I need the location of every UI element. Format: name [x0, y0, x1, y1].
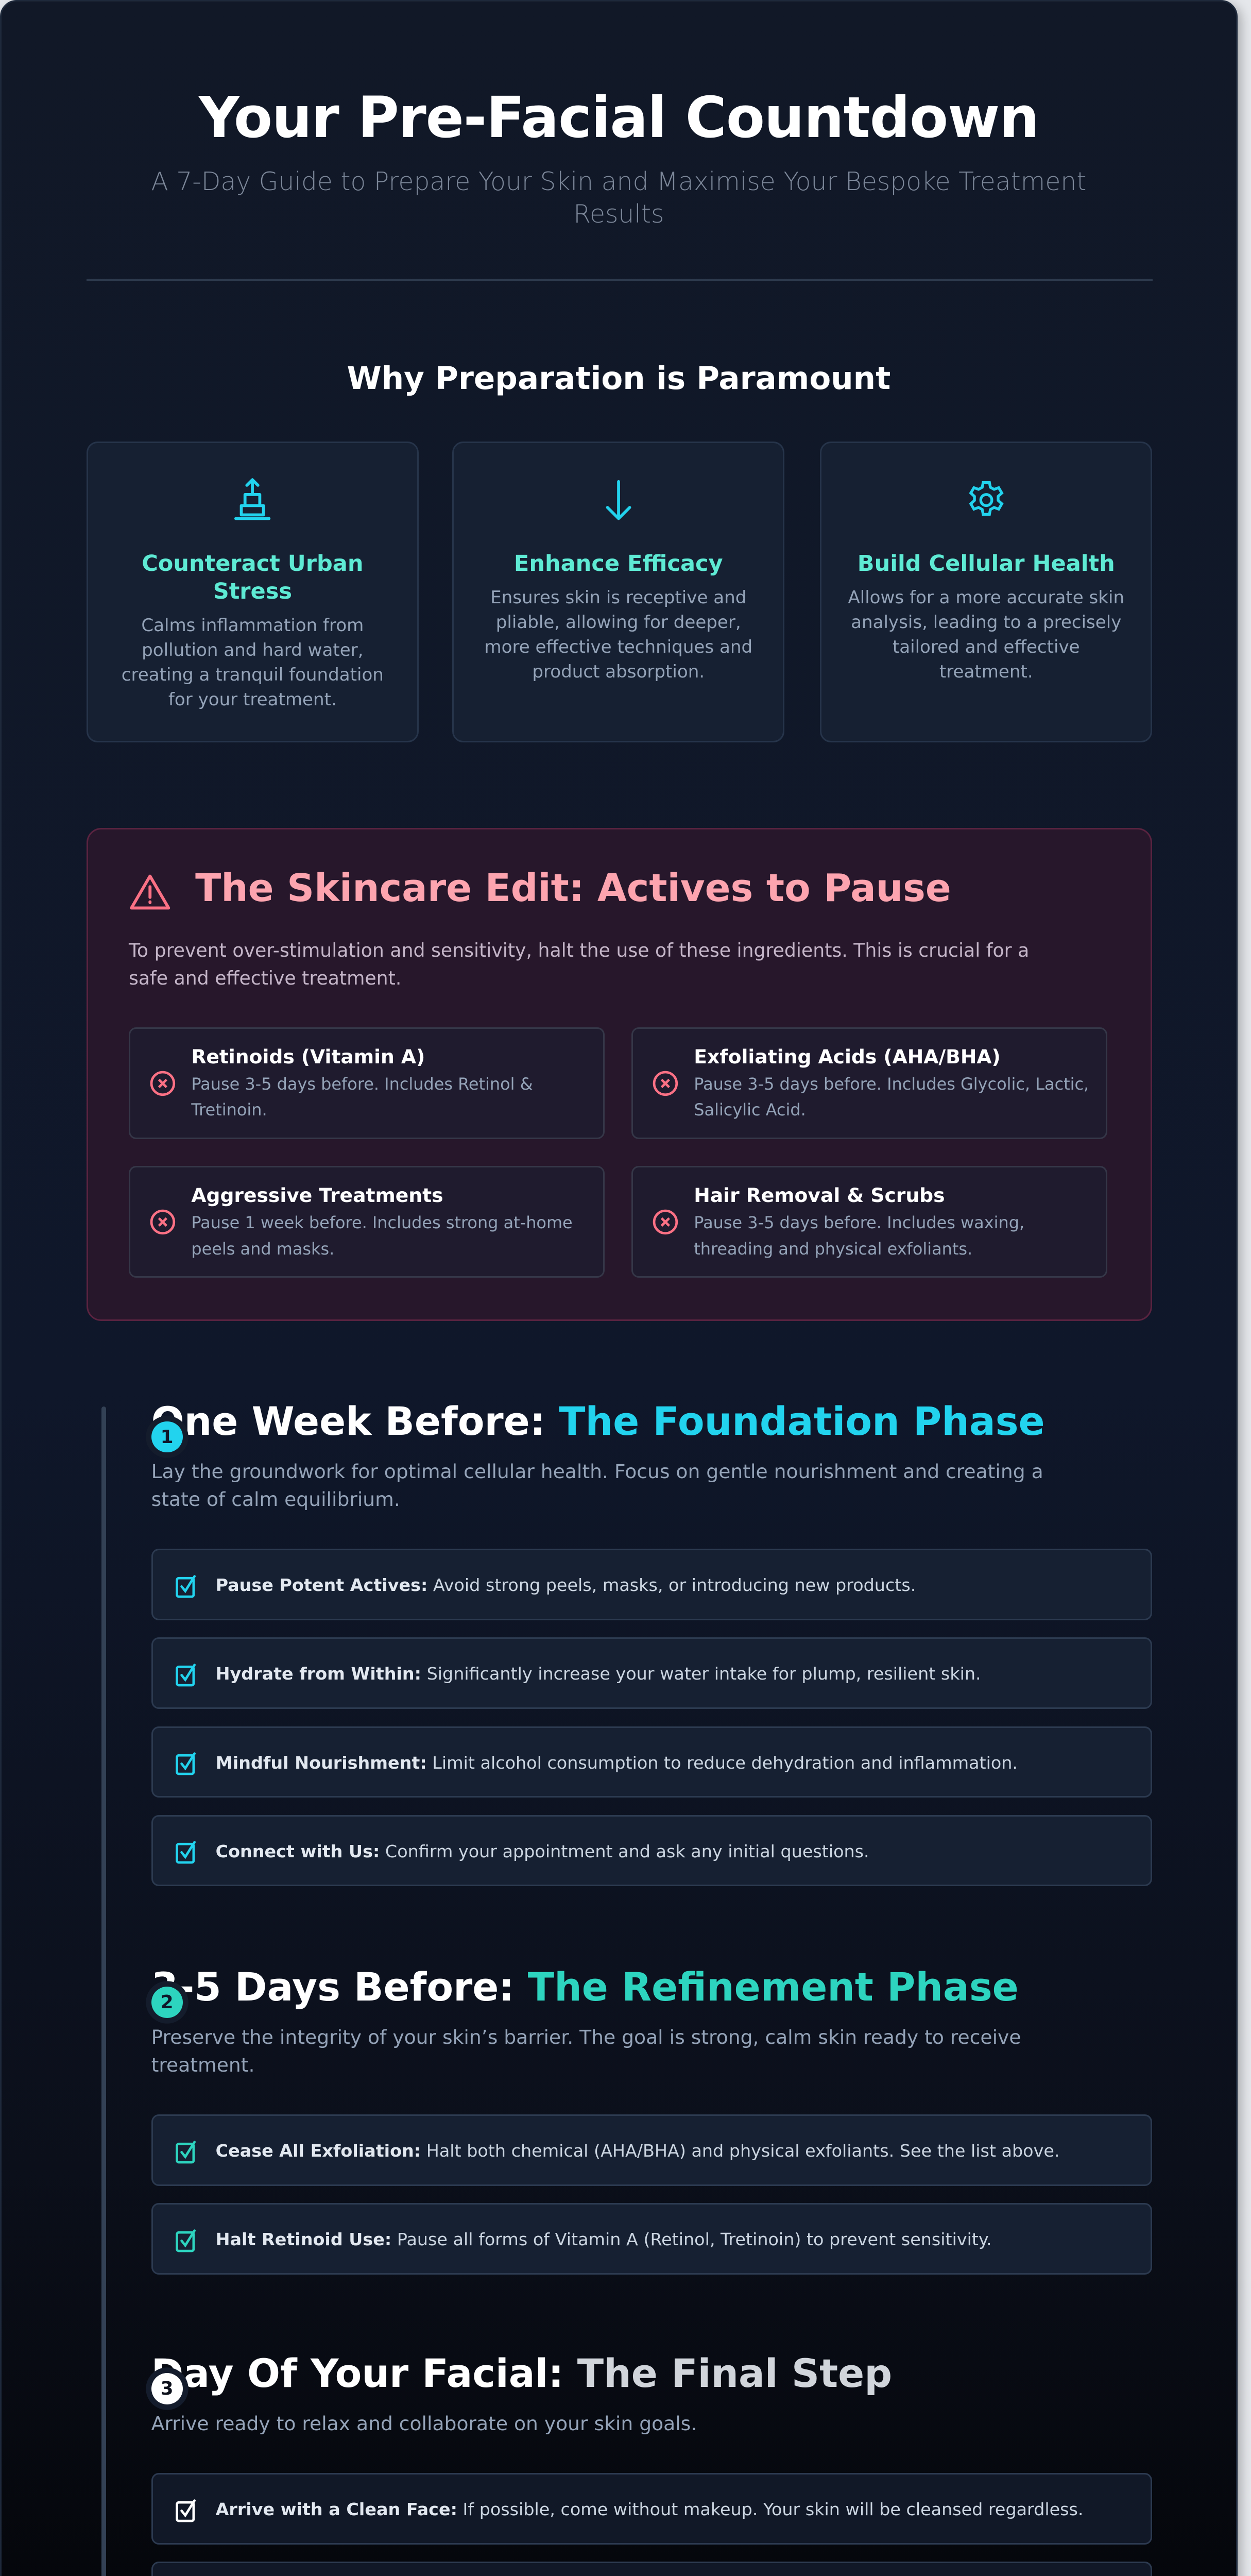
- item: exfoliating acids: [631, 1027, 1107, 1139]
- section 1: [151, 1399, 1152, 1886]
- item: [151, 1637, 1152, 1709]
- number 2: 2: [161, 1992, 174, 2013]
- item: exfoliating acids: Exfoliating Acids (AHA/BHA): [694, 1045, 1001, 1068]
- number 3: 3: [161, 2378, 174, 2399]
- icon: lighthouse: [234, 478, 271, 520]
- panel: counteract urban stress: [87, 442, 419, 742]
- desc 3: Arrive ready to relax and collaborate on your skin goals.: [151, 2412, 697, 2435]
- panel: build cellular health: [820, 442, 1152, 742]
- panel: actives to pause: [87, 828, 1152, 1321]
- panel: build cellular health: Build Cellular Health: [858, 551, 1115, 577]
- item: Hydrate from Within: Significantly increase your water intake for plump, resilient skin.: [216, 1664, 981, 1684]
- section 2: [146, 1964, 1152, 2275]
- heading 1: One Week Before: The Foundation Phase: [151, 1399, 1045, 1444]
- item: [151, 1815, 1152, 1886]
- item: Pause Potent Actives: Avoid strong peels, masks, or introducing new products.: [216, 1575, 916, 1595]
- item: [151, 2562, 1152, 2576]
- icon: arrow down: [606, 480, 631, 520]
- item: retinoids: Pause 3-5 days before. Includes Retinol & Tretinoin.: [191, 1074, 533, 1120]
- panel: enhance efficacy: [452, 442, 784, 742]
- number 3: [151, 2373, 183, 2404]
- panel: counteract urban stress: Calms inflammation from pollution and hard water, creating a tranquil foundation for your treatment.: [122, 615, 384, 710]
- item: retinoids: [129, 1027, 605, 1139]
- title: Your Pre-Facial Countdown: [199, 84, 1039, 150]
- item: exfoliating acids: Pause 3-5 days before. Includes Glycolic, Lactic, Salicylic Acid.: [694, 1074, 1089, 1120]
- item: [151, 1549, 1152, 1620]
- panel: counteract urban stress: Stress: [213, 579, 292, 604]
- heading: why preparation: Why Preparation is Paramount: [347, 360, 890, 397]
- panel: build cellular health: Allows for a more accurate skin analysis, leading to a precisely tailored and effective treatment.: [848, 587, 1124, 682]
- item: aggressive treatments: Pause 1 week before. Includes strong at-home peels and masks.: [191, 1213, 573, 1259]
- desc 1: Lay the groundwork for optimal cellular health. Focus on gentle nourishment and creating a state of calm equilibrium.: [151, 1460, 1043, 1511]
- item: [151, 2114, 1152, 2186]
- heading 2: 3-5 Days Before: The Refinement Phase: [151, 1964, 1019, 2010]
- item: hair removal: [631, 1166, 1107, 1278]
- item: [151, 1726, 1152, 1798]
- intro text: To prevent over-stimulation and sensitivity, halt the use of these ingredients. This is crucial for a safe and effective treatment.: [129, 939, 1029, 989]
- panel: enhance efficacy: Enhance Efficacy: [514, 551, 723, 577]
- item: Cease All Exfoliation: Halt both chemical (AHA/BHA) and physical exfoliants. See the list above.: [216, 2141, 1059, 2161]
- number 1: 1: [161, 1426, 174, 1448]
- item: Connect with Us: Confirm your appointment and ask any initial questions.: [216, 1841, 869, 1861]
- item: [151, 2473, 1152, 2545]
- item: Mindful Nourishment: Limit alcohol consumption to reduce dehydration and inflammation.: [216, 1753, 1018, 1773]
- section 3: [146, 2351, 1152, 2576]
- item: Halt Retinoid Use: Pause all forms of Vitamin A (Retinol, Tretinoin) to prevent sensitivity.: [216, 2229, 992, 2249]
- number 1: [151, 1421, 183, 1452]
- icon: warning: [130, 875, 170, 910]
- number 2: [151, 1987, 183, 2018]
- desc 2: Preserve the integrity of your skin’s barrier. The goal is strong, calm skin ready to receive treatment.: [151, 2026, 1021, 2076]
- item: hair removal: Pause 3-5 days before. Includes waxing, threading and physical exfoliants.: [694, 1213, 1024, 1259]
- panel heading: The Skincare Edit: Actives to Pause: [195, 867, 951, 910]
- timeline line: [101, 1406, 106, 2576]
- item: hair removal: Hair Removal & Scrubs: [694, 1184, 945, 1207]
- item: retinoids: Retinoids (Vitamin A): [191, 1045, 425, 1068]
- item: [151, 2203, 1152, 2275]
- item: aggressive treatments: Aggressive Treatments: [191, 1184, 443, 1207]
- panel: enhance efficacy: Ensures skin is receptive and pliable, allowing for deeper, more effective techniques and product absorption.: [484, 587, 752, 682]
- panel: counteract urban stress: Counteract Urban: [142, 551, 363, 577]
- heading 3: Day Of Your Facial: The Final Step: [151, 2351, 892, 2396]
- item: aggressive treatments: [129, 1166, 605, 1278]
- item: Arrive with a Clean Face: If possible, come without makeup. Your skin will be cleansed regardless.: [216, 2499, 1084, 2519]
- icon: gear: [969, 481, 1004, 516]
- subtitle: A 7-Day Guide to Prepare Your Skin and Maximise Your Bespoke Treatment Results: [151, 167, 1086, 229]
